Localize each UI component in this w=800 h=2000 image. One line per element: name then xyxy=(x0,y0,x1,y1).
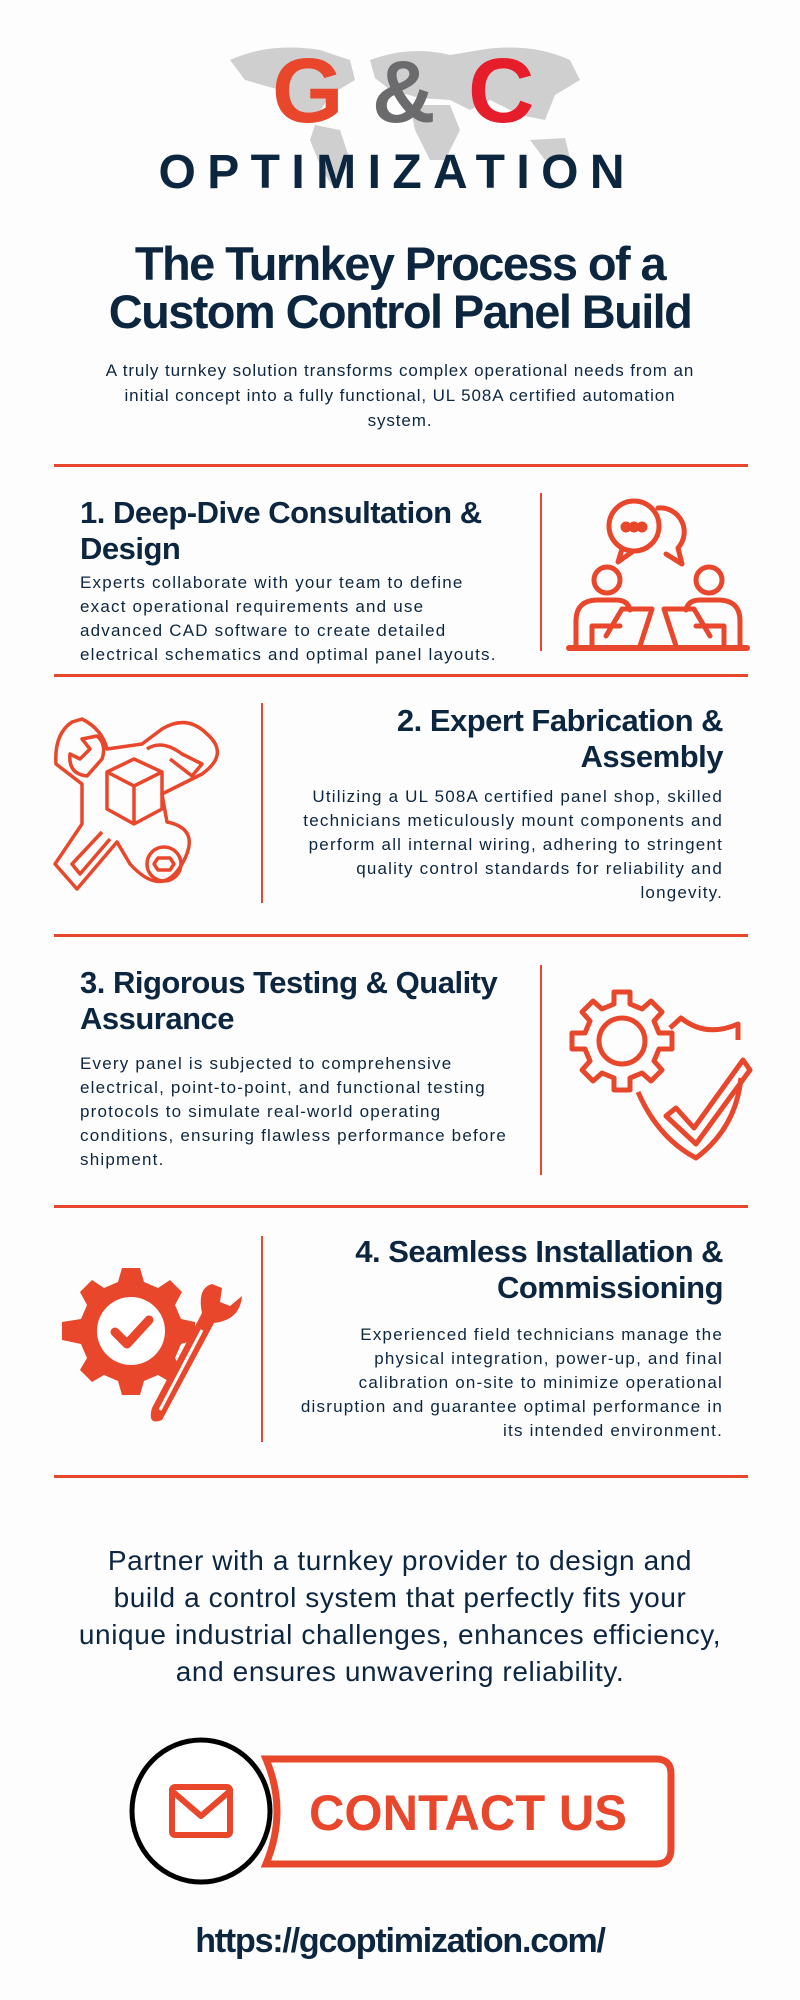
step 3 text: electrical, point-to-point, and functional testing xyxy=(80,1078,486,1097)
circle xyxy=(132,1740,270,1882)
icon: gear and wrench xyxy=(62,1268,242,1422)
step 4 heading xyxy=(355,1234,723,1305)
step 2 text: Utilizing a UL 508A certified panel shop, skilled xyxy=(312,787,723,806)
wordmark: OPTIMIZATION xyxy=(158,146,642,199)
step 2 text: longevity. xyxy=(640,883,723,902)
subtitle: initial concept into a fully functional, UL 508A certified automation xyxy=(124,386,675,405)
step 4 text xyxy=(301,1325,723,1440)
icon: consultation xyxy=(566,498,750,651)
closing statement: unique industrial challenges, enhances efficiency, xyxy=(79,1619,721,1650)
step 2 heading xyxy=(397,703,724,774)
step 1 heading xyxy=(80,495,482,566)
icon: fabrication tools xyxy=(53,717,220,891)
step 4 text: its intended environment. xyxy=(503,1421,723,1440)
step 4 text: physical integration, power-up, and final xyxy=(374,1349,723,1368)
step 2 text: technicians meticulously mount components and xyxy=(303,811,723,830)
title xyxy=(109,237,691,338)
url: https://gcoptimization.com/ xyxy=(195,1922,605,1960)
letters G & C: G xyxy=(272,40,344,142)
pill xyxy=(266,1759,671,1864)
step 3 text xyxy=(80,1054,507,1169)
logo: C xyxy=(468,40,534,142)
subtitle: system. xyxy=(368,411,432,430)
closing statement: Partner with a turnkey provider to design and xyxy=(108,1545,692,1576)
contact button xyxy=(130,1738,674,1884)
step 3 text: Every panel is subjected to comprehensive xyxy=(80,1054,452,1073)
world map xyxy=(230,48,580,190)
step 3 heading xyxy=(80,965,498,1036)
closing statement: and ensures unwavering reliability. xyxy=(176,1656,624,1687)
step 2 heading: Assembly xyxy=(581,739,723,774)
step 3 text: conditions, ensuring flawless performance before xyxy=(80,1126,507,1145)
logo xyxy=(158,40,642,199)
step 2 heading: 2. Expert Fabrication & xyxy=(397,703,723,738)
step 2 text: quality control standards for reliability and xyxy=(356,859,723,878)
step 3 heading: Assurance xyxy=(80,1001,234,1036)
step 4 text: calibration on-site to minimize operational xyxy=(359,1373,723,1392)
icon: envelope xyxy=(172,1787,230,1835)
label: CONTACT US xyxy=(309,1785,627,1841)
step 1 text xyxy=(80,573,497,664)
logo: & xyxy=(372,42,436,141)
step 4 heading: 4. Seamless Installation & xyxy=(355,1234,723,1269)
step 1 heading: 1. Deep-Dive Consultation & xyxy=(80,495,482,530)
step 1 text: exact operational requirements and use xyxy=(80,597,424,616)
step 3 text: shipment. xyxy=(80,1150,165,1169)
step 1 text: advanced CAD software to create detailed xyxy=(80,621,446,640)
step 4 text: Experienced field technicians manage the xyxy=(360,1325,723,1344)
step 1 heading: Design xyxy=(80,531,180,566)
icon: gear shield check xyxy=(570,990,752,1160)
subtitle xyxy=(106,361,694,430)
step 3 text: protocols to simulate real-world operating xyxy=(80,1102,441,1121)
step 1 text: Experts collaborate with your team to define xyxy=(80,573,464,592)
step 4 text: disruption and guarantee optimal performance in xyxy=(301,1397,723,1416)
closing statement: build a control system that perfectly fits your xyxy=(114,1582,686,1613)
title: Custom Control Panel Build xyxy=(109,285,691,338)
step 3 heading: 3. Rigorous Testing & Quality xyxy=(80,965,497,1000)
step 2 text xyxy=(303,787,723,902)
closing statement xyxy=(79,1545,721,1687)
step 2 text: perform all internal wiring, adhering to stringent xyxy=(309,835,723,854)
step 1 text: electrical schematics and optimal panel layouts. xyxy=(80,645,497,664)
step 4 heading: Commissioning xyxy=(497,1270,723,1305)
title: The Turnkey Process of a xyxy=(135,237,665,290)
subtitle: A truly turnkey solution transforms complex operational needs from an xyxy=(106,361,694,380)
